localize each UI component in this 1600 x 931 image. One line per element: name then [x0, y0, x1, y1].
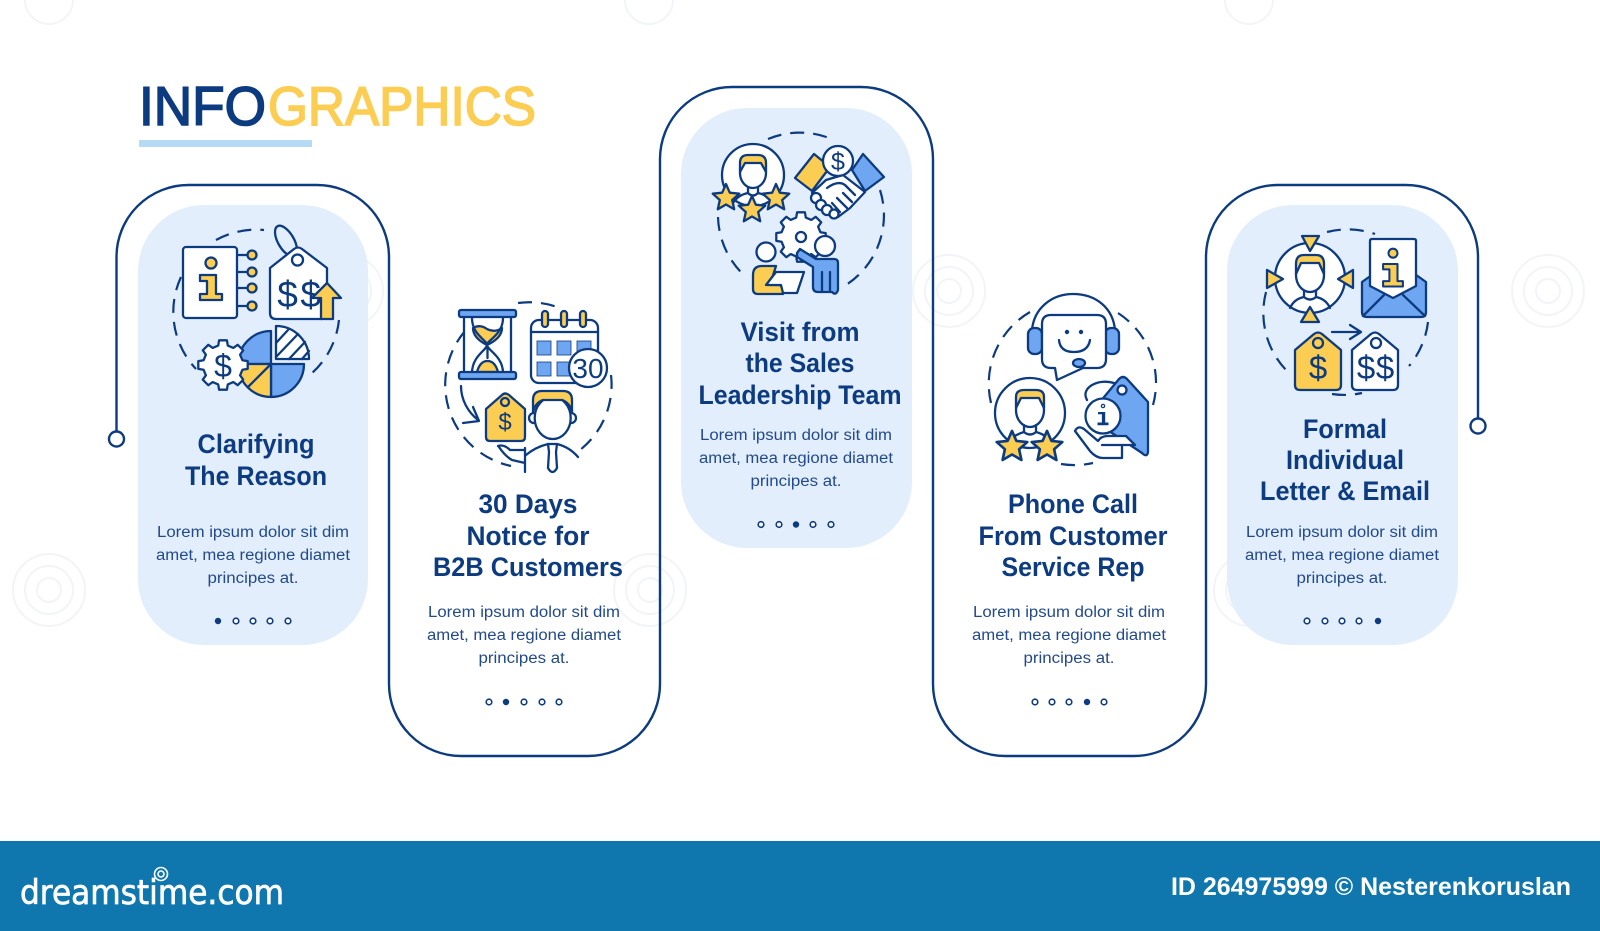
page dots	[486, 699, 562, 705]
title: INFO	[139, 75, 266, 137]
icon: hourglass, calendar, tag and person: $	[498, 409, 512, 436]
logo wordmark: dreamstime.com	[20, 873, 284, 913]
body text: amet, mea regione diamet	[1245, 547, 1440, 564]
panel: visit from sales leadership team	[698, 133, 902, 528]
heading: Service Rep	[1002, 552, 1144, 582]
footer bar	[0, 841, 1600, 931]
heading: The Reason	[185, 461, 327, 491]
connecting outline	[109, 87, 1486, 756]
icon: info, price tag, gear and pie: $	[214, 348, 232, 384]
heading: B2B Customers	[433, 552, 623, 582]
body text: amet, mea regione diamet	[972, 627, 1167, 644]
icon: rated person, handshake and team	[713, 133, 884, 294]
heading: From Customer	[978, 521, 1168, 551]
icon: person, envelope and price tags: $	[1357, 349, 1375, 386]
panel: formal individual letter and email	[1245, 229, 1440, 624]
heading: Leadership Team	[698, 380, 902, 410]
heading: Phone Call	[1008, 489, 1138, 519]
icon: info, price tag, gear and pie: $	[300, 274, 321, 315]
body text: principes at.	[750, 473, 842, 490]
body text: Lorem ipsum dolor sit dim	[1246, 524, 1438, 541]
icon: info, price tag, gear and pie	[173, 222, 341, 397]
heading: 30 Days	[478, 489, 578, 519]
heading: Notice for	[466, 521, 590, 551]
title	[139, 75, 536, 147]
icon: hourglass, calendar, tag and person	[445, 302, 612, 472]
page dots	[758, 521, 834, 528]
heading: Individual	[1286, 445, 1404, 475]
icon: info, price tag, gear and pie: $	[277, 274, 298, 315]
body text: amet, mea regione diamet	[699, 450, 894, 467]
heading: Visit from	[740, 317, 860, 347]
icon: headset bubble, rated person and info tag	[989, 294, 1156, 465]
panel: clarifying the reason	[156, 222, 351, 624]
body text: principes at.	[478, 650, 570, 667]
image credit: ID 264975999 © Nesterenkoruslan	[1171, 873, 1571, 901]
heading: Formal	[1303, 414, 1387, 444]
body text: principes at.	[1296, 570, 1388, 587]
panel: 30 days notice	[427, 302, 623, 705]
body text: amet, mea regione diamet	[156, 547, 351, 564]
body text: Lorem ipsum dolor sit dim	[700, 427, 892, 444]
body text: principes at.	[1024, 650, 1114, 667]
icon: person, envelope and price tags: $	[1376, 349, 1394, 386]
body text: principes at.	[208, 570, 298, 587]
body text: amet, mea regione diamet	[427, 627, 622, 644]
page dots	[1032, 699, 1107, 705]
body text: Lorem ipsum dolor sit dim	[428, 604, 620, 621]
title: GRAPHICS	[268, 75, 536, 137]
body text: Lorem ipsum dolor sit dim	[973, 604, 1165, 621]
icon: person, envelope and price tags: $	[1309, 349, 1327, 386]
panel backgrounds: filled cards	[138, 108, 1458, 645]
icon: person, envelope and price tags	[1263, 229, 1428, 395]
page dots	[215, 618, 291, 624]
heading: Letter & Email	[1260, 476, 1430, 506]
body text: Lorem ipsum dolor sit dim	[157, 524, 349, 541]
panel: phone call from customer service rep	[972, 294, 1168, 705]
logo spiral	[154, 868, 168, 880]
heading: Clarifying	[198, 429, 314, 459]
icon: rated person, handshake and team: $	[831, 148, 845, 176]
page dots	[1304, 618, 1381, 624]
heading: the Sales	[746, 348, 854, 378]
icon: hourglass, calendar, tag and person: 30	[572, 353, 604, 384]
